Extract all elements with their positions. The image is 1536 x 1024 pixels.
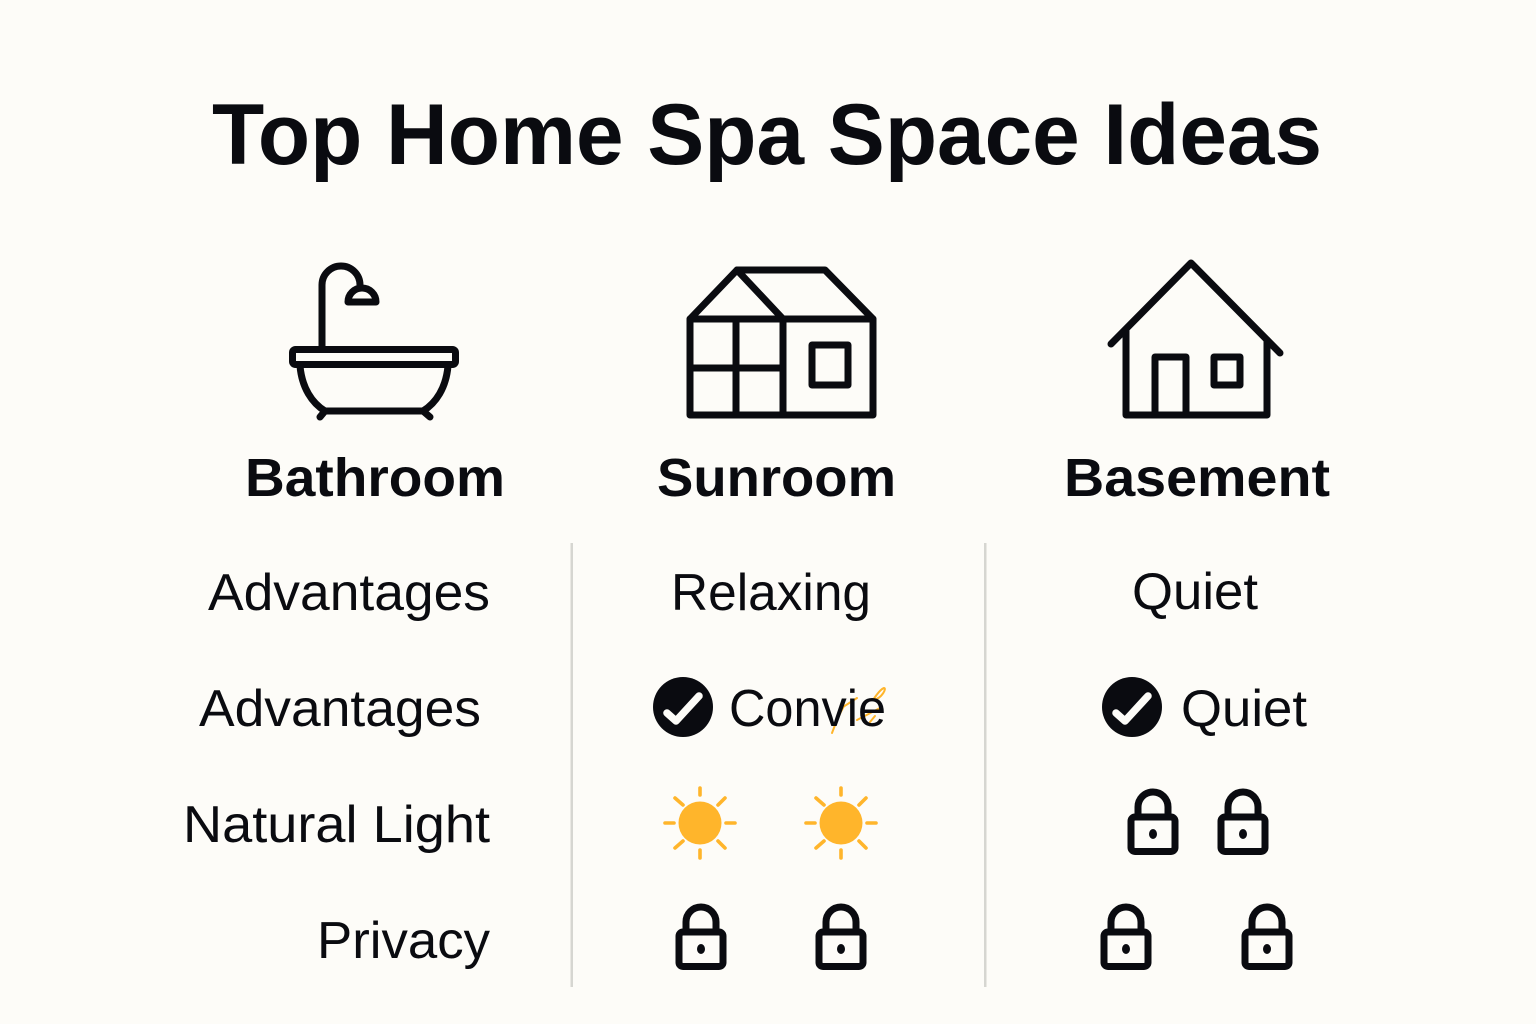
icon: sun right [806,788,876,858]
row label: Natural Light: Natural Light [183,796,491,854]
icon: lock basement 1 [1104,907,1148,966]
cell: check Quiet: Quiet [1181,680,1308,738]
icon: basement house [1111,263,1280,415]
cell: check Quiet [1102,677,1308,738]
icon: sunroom [690,270,873,415]
icon: lock sunroom 2 [819,907,863,966]
icon: lock sunroom 1 [679,907,723,966]
row label: Advantages second: Advantages [199,680,481,738]
row label: Advantages: Advantages [208,564,490,622]
column divider left [570,543,573,987]
cell: check Convie: Convie [729,680,886,738]
cell: Quiet: Quiet [1132,563,1259,621]
icon: lock basement light 2 [1221,792,1265,852]
cell: Relaxing: Relaxing [671,564,871,622]
row label: Privacy: Privacy [317,912,490,970]
heading: Bathroom: Bathroom [245,448,505,508]
column divider right [984,543,986,987]
icon: sun left [665,788,735,858]
heading: Sunroom: Sunroom [657,448,896,508]
heading: Basement: Basement [1064,448,1330,508]
icon: lock basement 2 [1245,907,1289,966]
icon: bathtub with shower [292,266,456,417]
cell: check Convie [653,677,886,738]
icon: lock basement light 1 [1131,792,1175,852]
title: Top Home Spa Space Ideas [212,87,1322,183]
